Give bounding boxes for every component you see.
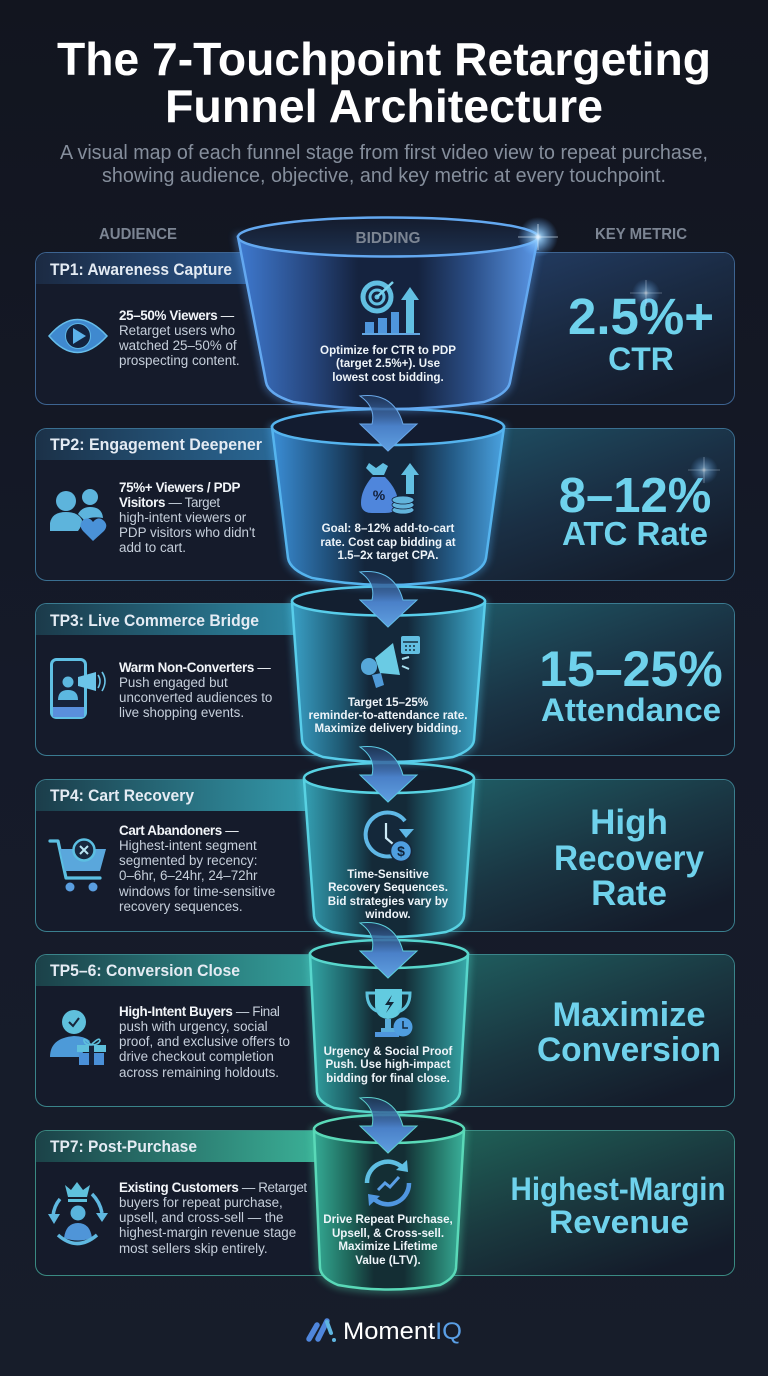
bidding text: TP4: window. [364, 908, 411, 921]
title: The 7-Touchpoint Retargeting [57, 33, 711, 85]
key metric: 15–25% [539, 641, 723, 697]
audience text: PDP visitors who didn't [119, 525, 256, 540]
key metric [554, 803, 705, 913]
icon: phone with megaphone [52, 660, 105, 718]
audience text: prospecting content. [119, 353, 240, 368]
key metric: 8–12% [559, 469, 711, 523]
icon: people with heart [50, 489, 106, 541]
funnel stage 6 [314, 1115, 464, 1290]
audience text: drive checkout completion [119, 1049, 274, 1064]
audience text: recovery sequences. [119, 899, 243, 914]
key metric: High [590, 803, 668, 842]
key metric [559, 469, 711, 552]
icon: money bag and coins [361, 463, 419, 514]
icon: megaphone and calendar [361, 636, 420, 688]
panel: TP5-6 [36, 954, 734, 1106]
column heading: key metric: KEY METRIC [595, 226, 687, 243]
bidding text: TP3: Maximize delivery bidding. [315, 722, 461, 735]
arrow: 2 to 3 [360, 572, 417, 627]
panel: TP3 [36, 604, 734, 756]
audience text: High-Intent Buyers — Final [119, 1004, 280, 1019]
bidding text: TP5-6: Push. Use high-impact [326, 1058, 451, 1071]
bidding text: TP1: (target 2.5%+). Use [336, 357, 441, 370]
bidding text: TP3: Target 15–25% [348, 696, 428, 709]
icon: shopping cart with x [50, 840, 106, 892]
bidding text: TP4 [328, 868, 449, 921]
subtitle: showing audience, objective, and key metric at every touchpoint. [102, 165, 666, 187]
key metric: CTR [608, 341, 674, 377]
key metric: Highest-Margin [510, 1171, 726, 1207]
panel: TP1 [36, 252, 734, 404]
subtitle: A visual map of each funnel stage from first video view to repeat purchase, [60, 142, 708, 164]
column heading: audience: AUDIENCE [99, 226, 177, 243]
funnel stage 2 [272, 409, 504, 585]
bidding text: TP1: lowest cost bidding. [332, 371, 444, 384]
key metric: Maximize [552, 996, 706, 1034]
bidding text: TP3: reminder-to-attendance rate. [308, 709, 468, 722]
bidding text: TP4: Time-Sensitive [347, 868, 429, 881]
bidding text: TP2: Goal: 8–12% add-to-cart [322, 522, 454, 535]
bidding text: TP4: Bid strategies vary by [328, 895, 449, 908]
column heading: bidding: BIDDING [356, 230, 420, 247]
audience text: live shopping events. [119, 705, 244, 720]
panel heading: TP2: Engagement Deepener [50, 436, 263, 454]
sparkle on funnel rim [518, 217, 558, 257]
audience text: watched 25–50% of [118, 338, 237, 353]
icon: buyer with gift [50, 1010, 106, 1065]
bidding text: TP7: Drive Repeat Purchase, [323, 1213, 453, 1226]
bidding text: TP5-6: Urgency & Social Proof [324, 1045, 453, 1058]
panel heading: TP7: Post-Purchase [50, 1138, 197, 1156]
audience text: Warm Non-Converters — [119, 660, 270, 675]
bidding text: TP2: 1.5–2x target CPA. [338, 549, 438, 562]
audience text: Existing Customers — Retarget [119, 1180, 307, 1195]
key metric [539, 641, 723, 728]
key metric: Revenue [549, 1204, 689, 1240]
icon: money bag and coins: % [373, 487, 386, 503]
icon: crown and customer cycle [48, 1182, 108, 1244]
audience text: Visitors — Target [119, 495, 220, 510]
arrow: 3 to 4 [360, 747, 417, 802]
audience text: across remaining holdouts. [119, 1065, 279, 1080]
arrow: 5 to 6 [360, 1098, 417, 1153]
panel heading: TP5–6: Conversion Close [50, 962, 240, 980]
bidding text: TP2 [320, 522, 456, 562]
panel heading: TP3: Live Commerce Bridge [50, 612, 259, 630]
funnel stage 5 [310, 940, 468, 1112]
title [57, 33, 711, 132]
bidding text: TP7: Upsell, & Cross-sell. [332, 1227, 444, 1240]
key metric: ATC Rate [562, 515, 708, 552]
sparkle: TP1 metric [630, 279, 662, 307]
audience text: segmented by recency: [119, 853, 257, 868]
audience text: push with urgency, social [119, 1019, 268, 1034]
funnel stage 1 [238, 218, 538, 409]
audience text: windows for time-sensitive [118, 884, 275, 899]
audience text: proof, and exclusive offers to [119, 1034, 290, 1049]
bidding text: TP5-6 [324, 1045, 453, 1085]
audience text: Push engaged but [119, 675, 228, 690]
panel: TP7 [36, 1130, 734, 1276]
title: Funnel Architecture [165, 80, 603, 132]
audience text: most sellers skip entirely. [119, 1241, 268, 1256]
audience text: unconverted audiences to [119, 690, 272, 705]
audience text: Cart Abandoners — [119, 823, 238, 838]
bidding text: TP7 [323, 1213, 453, 1267]
bidding text: TP2: rate. Cost cap bidding at [320, 536, 456, 549]
panel heading: TP4: Cart Recovery [50, 787, 195, 805]
bidding text: TP7: Maximize Lifetime [338, 1240, 438, 1253]
audience text: 0–6hr, 6–24hr, 24–72hr [119, 868, 258, 883]
bidding text: TP1: Optimize for CTR to PDP [320, 344, 456, 357]
sparkle: TP2 metric [688, 456, 720, 484]
arrow: 4 to 5 [360, 923, 417, 978]
audience text: add to cart. [119, 540, 186, 555]
bidding text: TP3 [308, 696, 468, 735]
icon: clock with dollar: $ [397, 843, 405, 859]
subtitle [60, 142, 708, 187]
panel: TP4 [36, 780, 734, 932]
key metric [510, 1171, 726, 1240]
icon: clock with dollar [366, 813, 414, 862]
icon: repeat cycle with trend [367, 1160, 409, 1206]
key metric: Attendance [541, 692, 721, 728]
icon: eye with play button [49, 320, 107, 352]
arrow: 1 to 2 [360, 396, 417, 451]
audience text: high-intent viewers or [119, 510, 247, 525]
audience text: highest-margin revenue stage [119, 1225, 296, 1240]
bidding text: TP7: Value (LTV). [355, 1254, 421, 1267]
key metric: Rate [591, 874, 667, 913]
panel heading: TP1: Awareness Capture [50, 261, 232, 279]
audience text: 75%+ Viewers / PDP [119, 480, 241, 495]
panel: TP2 [36, 428, 734, 580]
bidding text: TP4: Recovery Sequences. [328, 881, 448, 894]
funnel stage 4 [304, 763, 474, 937]
logo: MomentIQ: MomentIQ [343, 1318, 462, 1345]
icon: target and growth bars [362, 282, 420, 335]
key metric: 2.5%+ [568, 288, 714, 345]
key metric [568, 288, 714, 377]
funnel stage 3 [292, 586, 485, 762]
audience text: Retarget users who [119, 323, 235, 338]
key metric: Conversion [537, 1031, 721, 1069]
audience text: Highest-intent segment [119, 838, 257, 853]
audience text: upsell, and cross-sell — the [119, 1210, 283, 1225]
audience text: 25–50% Viewers — [119, 308, 234, 323]
audience text: buyers for repeat purchase, [119, 1195, 283, 1210]
bidding text: TP5-6: bidding for final close. [326, 1072, 450, 1085]
bidding text: TP1 [320, 344, 456, 384]
icon: trophy with clock [367, 989, 412, 1037]
key metric: Recovery [554, 839, 705, 878]
key metric [537, 996, 721, 1069]
